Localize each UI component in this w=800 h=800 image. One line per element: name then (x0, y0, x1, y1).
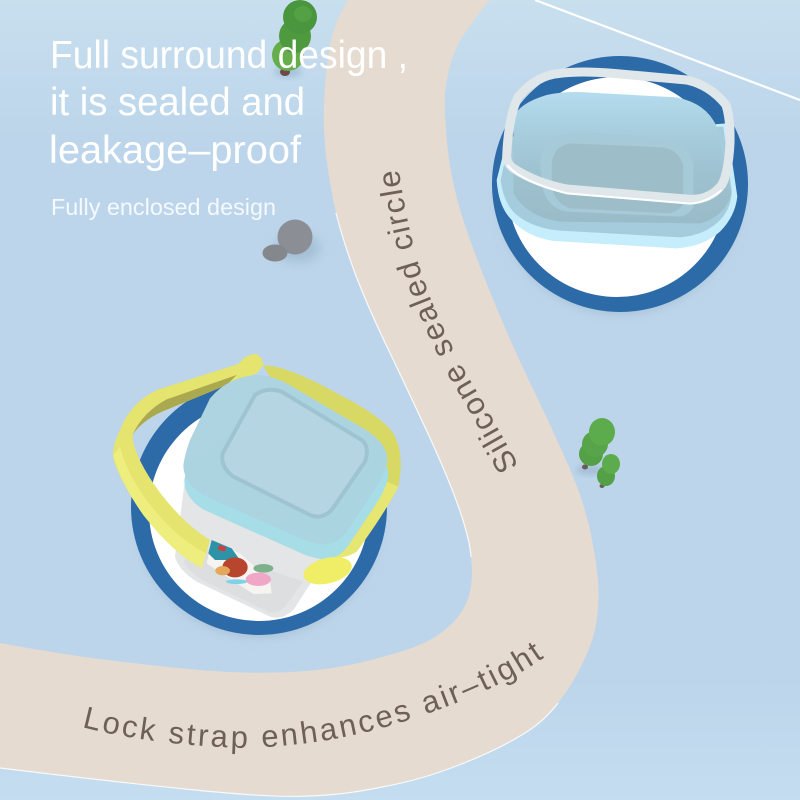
icon: grey rocks (262, 220, 320, 262)
lid inner panel (222, 390, 367, 517)
strap left (113, 354, 263, 568)
strap underside shadow (132, 375, 237, 435)
container interior (513, 92, 732, 223)
lid (183, 375, 387, 544)
title text: Full surround design , (50, 34, 408, 77)
strap right (263, 365, 401, 558)
container base rim (497, 123, 737, 248)
container body (175, 480, 330, 618)
subtitle: Fully enclosed design (51, 194, 276, 220)
title text (49, 34, 408, 172)
sealing ring (507, 72, 730, 199)
clasp (301, 552, 355, 589)
icon: green tree top (272, 0, 317, 78)
strap lower highlight (113, 447, 206, 568)
blue circle badge left (131, 379, 387, 635)
road label: lock strap: Lock strap enhances air–tight (84, 642, 544, 754)
road label: silicone sealed circle: Silicone sealed circle (380, 172, 516, 472)
sticker (207, 540, 273, 594)
blue circle badge top right (492, 56, 748, 312)
lid rim (184, 390, 388, 559)
icon: green trees right (576, 418, 620, 488)
winding beige road (0, 0, 598, 796)
food container with lock strap (113, 354, 401, 618)
title text: leakage–proof (49, 129, 301, 172)
container with sealing ring (497, 72, 737, 248)
title text: it is sealed and (50, 81, 305, 124)
